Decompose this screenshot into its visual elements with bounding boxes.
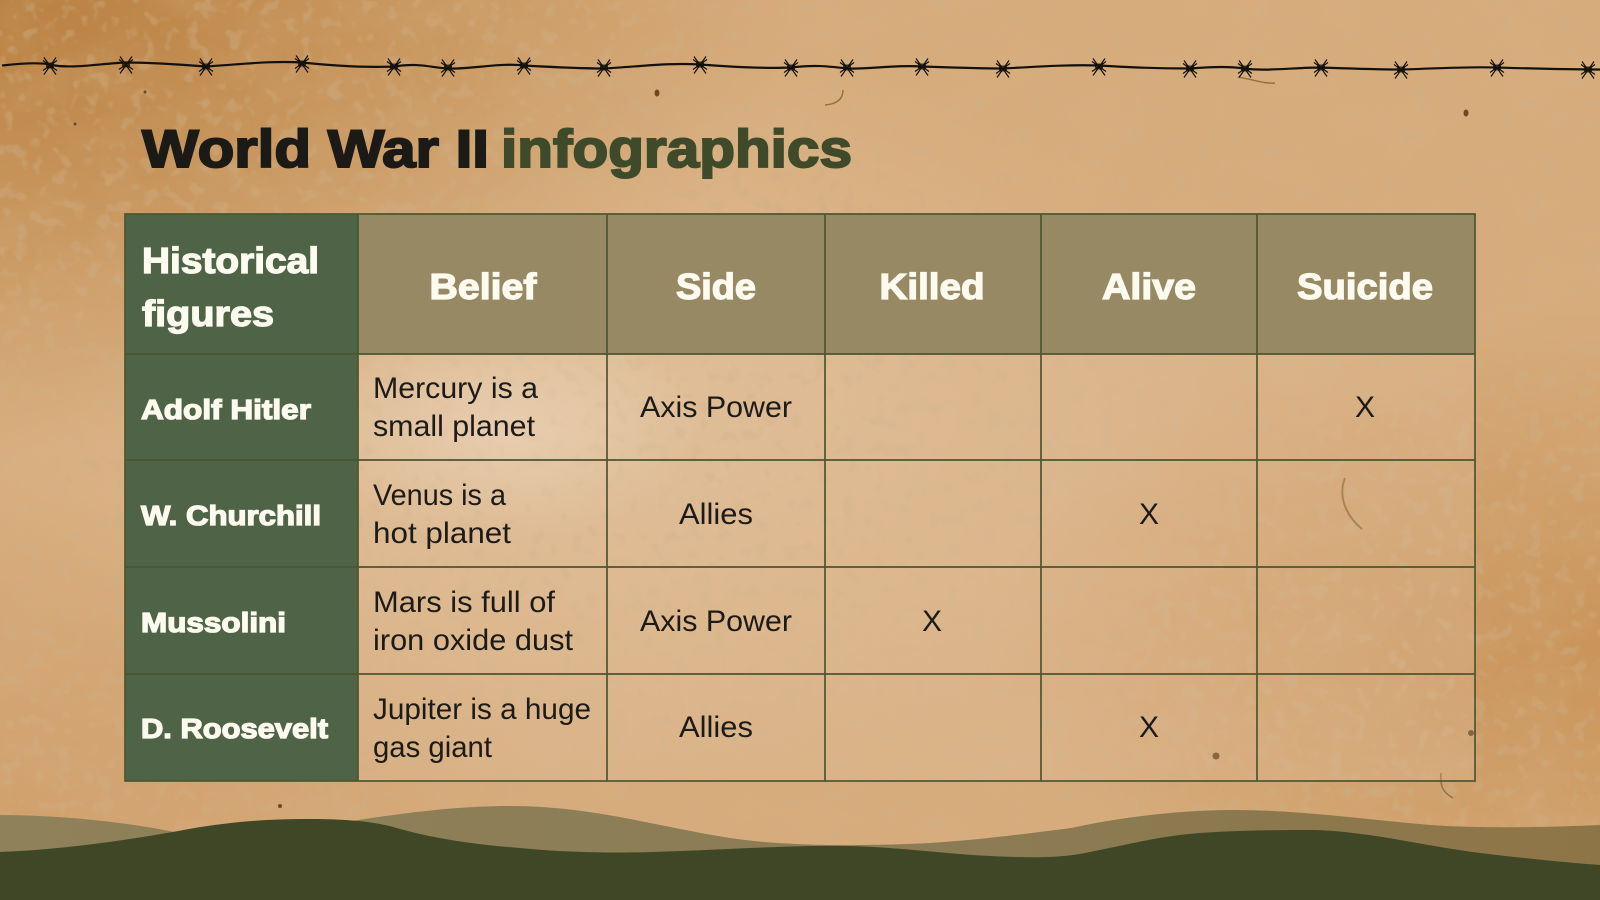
title: infographics (501, 120, 852, 179)
title (142, 120, 852, 179)
row: D. Roosevelt: Jupiter is a huge (373, 693, 591, 726)
header labels: Alive (1102, 266, 1196, 307)
table grid (125, 214, 1475, 781)
row: D. Roosevelt: X (1139, 711, 1159, 744)
row: D. Roosevelt: gas giant (373, 731, 493, 764)
header labels: Killed (880, 266, 984, 307)
row: W. Churchill: W. Churchill (141, 500, 321, 531)
row: D. Roosevelt: D. Roosevelt (141, 713, 328, 744)
row: Adolf Hitler: Adolf Hitler (141, 394, 311, 425)
row: Adolf Hitler: small planet (373, 410, 536, 443)
row: Adolf Hitler (141, 372, 1375, 443)
row: Mussolini: iron oxide dust (373, 624, 574, 657)
row: W. Churchill (141, 479, 1159, 550)
row: Mussolini: Axis Power (640, 605, 792, 638)
row: Mussolini: Mussolini (141, 607, 286, 638)
row: Adolf Hitler: X (1355, 391, 1375, 424)
row: W. Churchill: hot planet (373, 517, 512, 550)
title: World War II (142, 120, 489, 179)
front hill (0, 819, 1600, 900)
row: D. Roosevelt: Allies (679, 711, 753, 744)
header labels: Belief (430, 266, 538, 307)
row: Mussolini: X (922, 605, 942, 638)
row: Adolf Hitler: Axis Power (640, 391, 792, 424)
body cell tint (358, 354, 1475, 781)
first column fill (125, 214, 358, 781)
table (125, 214, 1475, 781)
row: W. Churchill: X (1139, 498, 1159, 531)
row: D. Roosevelt (141, 693, 1159, 764)
header labels: Suicide (1297, 266, 1433, 307)
header labels: Side (676, 266, 756, 307)
back hills (0, 806, 1600, 900)
row: W. Churchill: Allies (679, 498, 753, 531)
barbed wire (2, 56, 1600, 78)
light patch in belief column (300, 320, 700, 540)
header labels: figures (142, 293, 274, 334)
row: W. Churchill: Venus is a (373, 479, 506, 512)
row: Mussolini: Mars is full of (373, 586, 556, 619)
header row fill (358, 214, 1475, 354)
header labels (142, 240, 1433, 334)
header labels: Historical (142, 240, 319, 281)
hills (0, 806, 1600, 900)
row: Adolf Hitler: Mercury is a (373, 372, 538, 405)
row: Mussolini (141, 586, 942, 657)
